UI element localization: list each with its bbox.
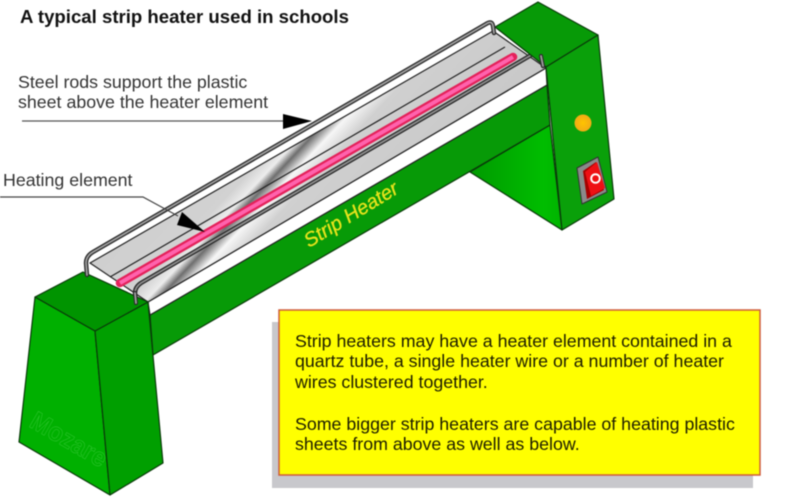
metallic reflector tray	[90, 31, 546, 302]
callout text: wires clustered together.	[294, 372, 488, 392]
callout text: quartz tube, a single heater wire or a number of heater	[295, 351, 724, 371]
back steel rod	[86, 22, 494, 275]
callout box	[279, 310, 760, 475]
arrow: steel rods	[22, 114, 312, 129]
label: steel rods: sheet above the heater element	[18, 92, 268, 112]
indicator lamp	[574, 114, 592, 132]
label: steel rods	[18, 72, 268, 112]
label: steel rods: Steel rods support the plastic	[18, 72, 247, 92]
inner reflector edge	[110, 47, 505, 277]
callout text: sheets from above as well as below.	[295, 434, 580, 454]
strip heater illustration	[19, 2, 614, 495]
callout text	[294, 331, 735, 454]
callout: strip heater types	[272, 310, 760, 488]
heating element	[120, 57, 513, 283]
callout shadow	[272, 322, 753, 488]
label: heating element: Heating element	[3, 170, 133, 190]
arrow: heating element	[0, 197, 205, 232]
callout text: Strip heaters may have a heater element contained in a	[295, 331, 732, 351]
front steel rod	[135, 52, 543, 303]
left support block	[19, 272, 163, 495]
back leg of right support	[470, 125, 562, 230]
title: A typical strip heater used in schools	[20, 6, 349, 27]
green front beam	[150, 85, 550, 355]
rocker switch	[577, 157, 607, 204]
strip heater label on beam: Strip Heater	[300, 177, 404, 252]
white lower tray band	[148, 68, 547, 315]
right support block	[495, 2, 614, 230]
front rod uprights over block	[135, 56, 543, 303]
callout text: Some bigger strip heaters are capable of heating plastic	[295, 414, 735, 434]
faded maker logo: Mozare	[25, 405, 113, 473]
